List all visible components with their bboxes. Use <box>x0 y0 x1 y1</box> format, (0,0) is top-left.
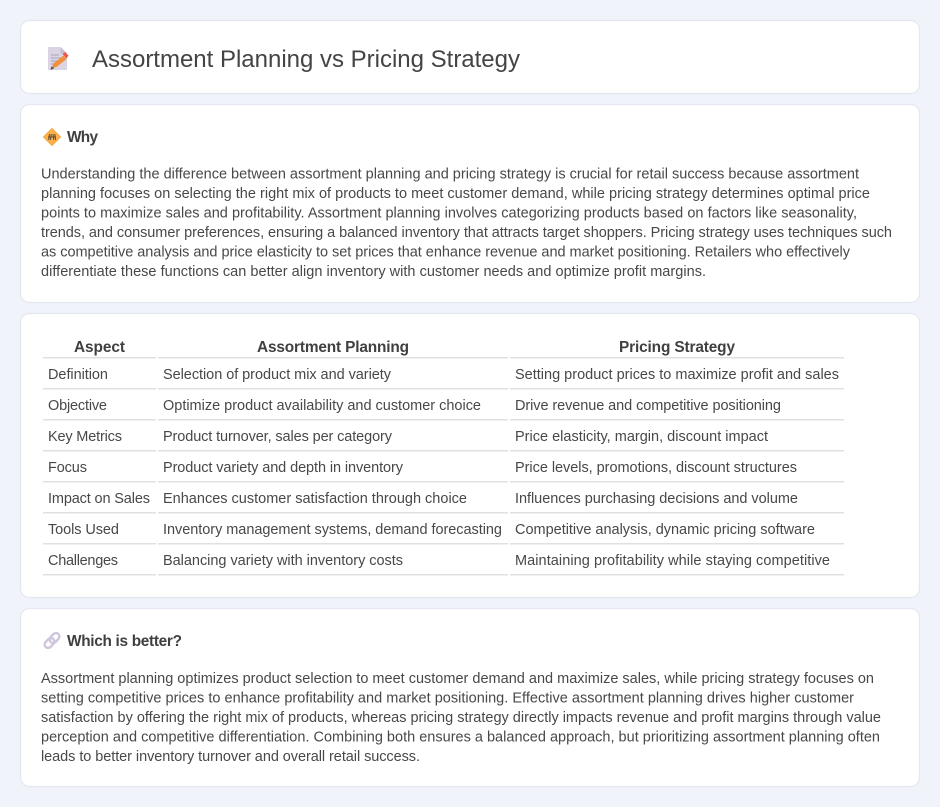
table row: focus: Focus <box>48 460 87 476</box>
icon: memo with pencil <box>48 47 68 70</box>
panel: why <box>20 104 920 302</box>
text block: why explanation: trends, and consumer preferences, ensuring a balanced inventory that attracts target shoppers. Pricing strategy uses techniques such <box>41 225 892 241</box>
table row: focus <box>43 460 844 482</box>
table row: impact on sales: Enhances customer satisfaction through choice <box>163 491 467 507</box>
text block: which is better explanation: Assortment planning optimizes product selection to meet customer demand and maximize sales, while pricing strategy focuses on <box>41 671 874 687</box>
icon: link <box>43 632 61 649</box>
table row: key metrics: Key Metrics <box>48 429 122 445</box>
table row: challenges <box>43 553 844 576</box>
panel: which is better <box>20 608 920 786</box>
text block: why explanation: planning focuses on selecting the right mix of products to meet customer demand, while pricing strategy determines optimal price <box>41 186 870 202</box>
table row: challenges: Challenges <box>48 553 118 569</box>
heading: why: Why <box>67 129 98 146</box>
text block: which is better explanation: satisfaction by offering the right mix of products, whereas pricing strategy directly impacts revenue and profit margins through value <box>41 710 881 726</box>
table row: objective: Objective <box>48 398 107 414</box>
table row: tools used <box>43 522 844 544</box>
table row: objective: Drive revenue and competitive positioning <box>515 398 781 414</box>
table row: tools used: Inventory management systems, demand forecasting <box>163 522 502 538</box>
table row: key metrics: Price elasticity, margin, discount impact <box>515 429 768 445</box>
table row: objective <box>43 398 844 420</box>
table row: challenges: Balancing variety with inventory costs <box>163 553 403 569</box>
text block: which is better explanation: setting competitive prices to enhance profitability and market positioning. Effective assortment planning drives higher customer <box>41 690 854 706</box>
text block: which is better explanation: perception and competitive differentiation. Combining both ensures a balanced approach, but prioritizing assortment planning often <box>41 730 880 746</box>
heading: which is better: Which is better? <box>67 633 182 650</box>
table header row <box>43 339 844 358</box>
title: Assortment Planning vs Pricing Strategy <box>92 46 520 73</box>
panel: comparison table <box>20 314 920 598</box>
icon: construction diamond <box>44 128 60 146</box>
table row: focus: Price levels, promotions, discount structures <box>515 460 797 476</box>
table row: tools used: Tools Used <box>48 522 119 538</box>
table row: key metrics: Product turnover, sales per category <box>163 429 393 445</box>
table row: key metrics <box>43 429 844 452</box>
panel: title header <box>20 20 920 94</box>
table row: objective: Optimize product availability and customer choice <box>163 398 481 414</box>
text block: why explanation: Understanding the difference between assortment planning and pricing strategy is crucial for retail success because assortment <box>41 166 859 182</box>
table row: focus: Product variety and depth in inventory <box>163 460 404 476</box>
table row: tools used: Competitive analysis, dynamic pricing software <box>515 522 815 538</box>
table row: challenges: Maintaining profitability while staying competitive <box>515 553 830 569</box>
table row: impact on sales <box>43 491 844 514</box>
table header row: Pricing Strategy <box>619 339 735 356</box>
table row: definition: Definition <box>48 367 108 383</box>
table row: impact on sales: Influences purchasing decisions and volume <box>515 491 798 507</box>
table row: definition: Setting product prices to maximize profit and sales <box>515 367 839 383</box>
text block: why explanation: differentiate these functions can better align inventory with customer needs and optimize profit margins. <box>41 264 706 280</box>
table row: impact on sales: Impact on Sales <box>48 491 150 507</box>
text block: why explanation: points to maximize sales and profitability. Assortment planning involves categorizing products based on factors like seasonality, <box>41 206 857 222</box>
text block: why explanation: as competitive analysis and price elasticity to set prices that enhance revenue and market positioning. Retailers who effectively <box>41 244 851 260</box>
table header row: Assortment Planning <box>257 339 409 356</box>
table row: definition <box>43 367 844 390</box>
text block: why explanation <box>41 166 892 280</box>
table row: definition: Selection of product mix and variety <box>163 367 392 383</box>
text block: which is better explanation <box>41 671 881 765</box>
text block: which is better explanation: leads to better inventory turnover and overall retail success. <box>41 749 420 765</box>
table header row: Aspect <box>74 339 125 356</box>
